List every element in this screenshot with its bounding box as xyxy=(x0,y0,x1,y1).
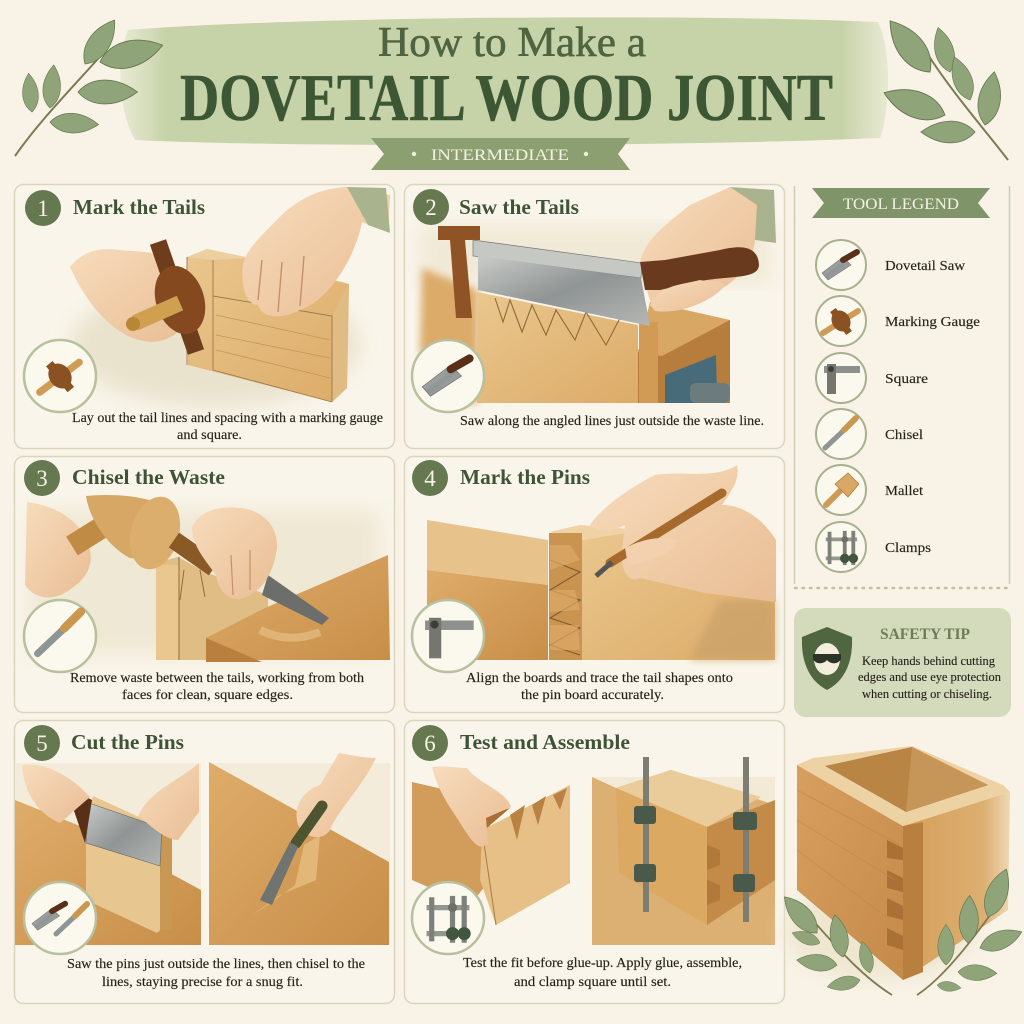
legend item: clamps: Clamps xyxy=(885,541,931,556)
legend item: mallet: Mallet xyxy=(885,484,923,499)
step number 3 xyxy=(24,460,60,496)
legend item: square: Square xyxy=(885,372,928,387)
step number 1 xyxy=(25,190,61,226)
right hand xyxy=(242,187,390,316)
panel 5: cut the pins xyxy=(14,720,394,1004)
vertical board xyxy=(156,557,268,660)
description: faces for clean, square edges. xyxy=(122,687,293,702)
leaves: bottom left xyxy=(777,890,892,995)
step number 6: 6 xyxy=(424,731,436,756)
panel 1: mark the tails xyxy=(14,184,394,448)
step number 4 xyxy=(412,460,448,496)
description xyxy=(70,670,364,702)
leaves: bottom right xyxy=(917,865,1024,995)
tool icon: saw and chisel xyxy=(24,882,96,954)
title line 2: DOVETAIL WOOD JOINT xyxy=(180,61,833,135)
legend item: square xyxy=(816,353,928,403)
safety text: edges and use eye protection xyxy=(858,670,1002,684)
step number 2: 2 xyxy=(425,195,437,220)
step number 2 xyxy=(413,189,449,225)
chisel xyxy=(174,540,214,568)
panel 3: chisel the waste xyxy=(14,456,394,712)
legend item: marking gauge: Marking Gauge xyxy=(885,315,980,330)
step number 5: 5 xyxy=(36,731,48,756)
icon: shield with goggles xyxy=(802,627,852,690)
illustration: sawing pins xyxy=(15,763,201,945)
writing hand xyxy=(590,465,776,602)
legend item: dovetail saw: Dovetail Saw xyxy=(885,259,966,274)
panel 4: mark the pins xyxy=(404,456,784,712)
panel 2: saw the tails xyxy=(404,184,784,448)
difficulty ribbon: INTERMEDIATE xyxy=(431,147,569,164)
leaves: top left xyxy=(15,14,166,156)
heading: Cut the Pins xyxy=(71,730,184,754)
step number 5 xyxy=(24,725,60,761)
heading: Saw the Tails xyxy=(459,195,579,219)
safety text: Keep hands behind cutting xyxy=(862,654,996,668)
step number 4: 4 xyxy=(424,466,436,491)
title banner xyxy=(120,17,888,145)
legend ribbon: TOOL LEGEND xyxy=(843,196,959,213)
description xyxy=(463,955,742,989)
illustration: clamped joint xyxy=(592,757,775,945)
description: Lay out the tail lines and spacing with a marking gauge xyxy=(72,410,383,425)
panel 6: test and assemble xyxy=(404,720,784,1004)
title line 1: How to Make a xyxy=(378,20,646,66)
legend item: chisel xyxy=(816,409,923,459)
description: Test the fit before glue-up. Apply glue, assemble, xyxy=(463,955,742,970)
bench block xyxy=(206,555,390,660)
legend ribbon xyxy=(812,188,990,218)
step number 1: 1 xyxy=(37,196,49,221)
illustration: chiseling with mallet xyxy=(25,491,390,662)
tool icon: chisel xyxy=(24,600,96,672)
illustration: sawing the tails xyxy=(420,187,776,403)
description: Saw along the angled lines just outside the waste line. xyxy=(460,413,764,428)
safety text: when cutting or chiseling. xyxy=(862,687,992,701)
heading: Chisel the Waste xyxy=(72,465,225,489)
hand xyxy=(297,753,376,837)
gauge xyxy=(158,242,196,352)
callout: safety tip xyxy=(794,608,1011,717)
description xyxy=(72,410,383,442)
heading: Test and Assemble xyxy=(460,730,630,754)
step number 6 xyxy=(412,725,448,761)
difficulty ribbon xyxy=(371,138,630,170)
legend item: marking gauge xyxy=(816,296,980,346)
hand with saw handle xyxy=(640,187,760,310)
finished dovetail box xyxy=(777,746,1024,995)
left hand xyxy=(70,249,190,342)
mallet xyxy=(72,526,104,546)
right hand xyxy=(192,507,277,599)
description: lines, staying precise for a snug fit. xyxy=(102,974,303,989)
description: Saw the pins just outside the lines, then chisel to the xyxy=(67,956,365,971)
description: the pin board accurately. xyxy=(521,687,664,702)
pencil xyxy=(610,493,722,563)
illustration: chiseling pins xyxy=(209,753,390,945)
step number 3: 3 xyxy=(36,466,48,491)
leaves: top right xyxy=(880,13,1008,160)
gauge in background xyxy=(438,226,480,318)
tool icon: dovetail saw xyxy=(412,340,484,412)
description: Align the boards and trace the tail shapes onto xyxy=(466,670,733,685)
description: and square. xyxy=(177,427,242,442)
saw xyxy=(473,240,642,278)
legend item: clamps xyxy=(816,522,931,572)
illustration: tracing pins xyxy=(427,465,776,660)
description xyxy=(466,670,733,702)
legend item: chisel: Chisel xyxy=(885,428,923,443)
description: and clamp square until set. xyxy=(514,974,671,989)
description xyxy=(67,956,365,989)
left hand xyxy=(25,502,91,597)
vise xyxy=(665,355,717,403)
tool icon: marking gauge xyxy=(24,340,96,412)
heading: Mark the Tails xyxy=(73,195,205,219)
illustration: test fit xyxy=(412,766,570,925)
panel: tool legend xyxy=(794,186,1010,588)
safety heading: SAFETY TIP xyxy=(880,626,970,643)
description: Remove waste between the tails, working from both xyxy=(70,670,364,685)
heading: Mark the Pins xyxy=(460,465,590,489)
safety text xyxy=(858,654,1002,701)
legend item: dovetail saw xyxy=(816,240,966,290)
illustration: marking gauge on board xyxy=(70,187,390,407)
tool icon: clamps xyxy=(412,882,484,954)
tool icon: square xyxy=(412,600,484,672)
legend item: mallet xyxy=(816,465,923,515)
